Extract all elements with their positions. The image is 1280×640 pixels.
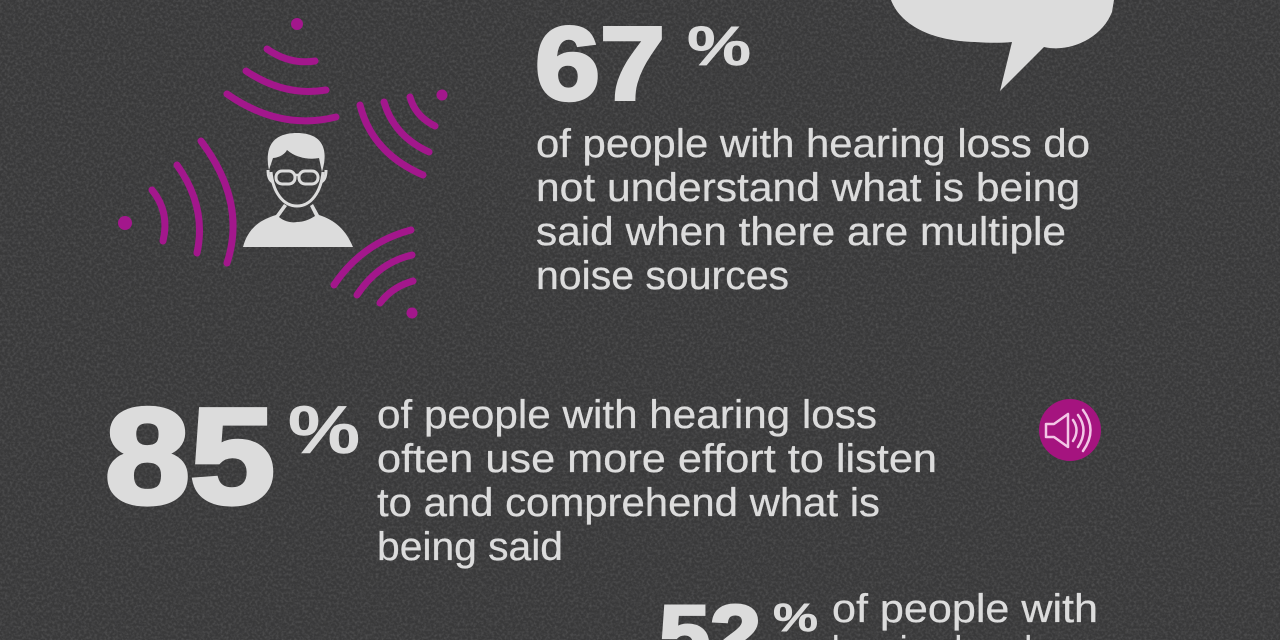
percent sign: % bbox=[687, 14, 751, 77]
person with glasses bbox=[243, 133, 353, 247]
number 67: 67 bbox=[535, 6, 665, 122]
percent sign: % bbox=[288, 392, 360, 468]
number 85: 85 bbox=[105, 380, 275, 532]
stat: 85 percent bbox=[105, 380, 937, 569]
text block bbox=[377, 393, 937, 569]
percent sign: % bbox=[773, 596, 818, 640]
stat: 67 percent bbox=[535, 6, 1090, 298]
text block: said when there are multiple bbox=[536, 210, 1066, 254]
noise waves from top bbox=[227, 18, 336, 121]
noise waves from left bbox=[118, 141, 233, 263]
text block bbox=[536, 122, 1090, 298]
text block: not understand what is being bbox=[536, 166, 1080, 210]
text block: to and comprehend what is bbox=[377, 481, 880, 525]
noise waves from right bbox=[360, 90, 448, 175]
icon: speech bubble bbox=[891, 0, 1114, 91]
text block: being said bbox=[377, 525, 563, 569]
icon: person surrounded by noise sources bbox=[118, 18, 448, 318]
text block: often use more effort to listen bbox=[377, 437, 937, 481]
text block: of people with hearing loss do bbox=[536, 122, 1090, 166]
text block: of people with bbox=[832, 587, 1098, 631]
stat: 52 percent bbox=[659, 587, 1098, 640]
noise waves from bottom right bbox=[334, 230, 418, 318]
text block: of people with hearing loss bbox=[377, 393, 877, 437]
icon: speaker badge bbox=[1039, 399, 1101, 461]
text block: noise sources bbox=[536, 254, 789, 298]
